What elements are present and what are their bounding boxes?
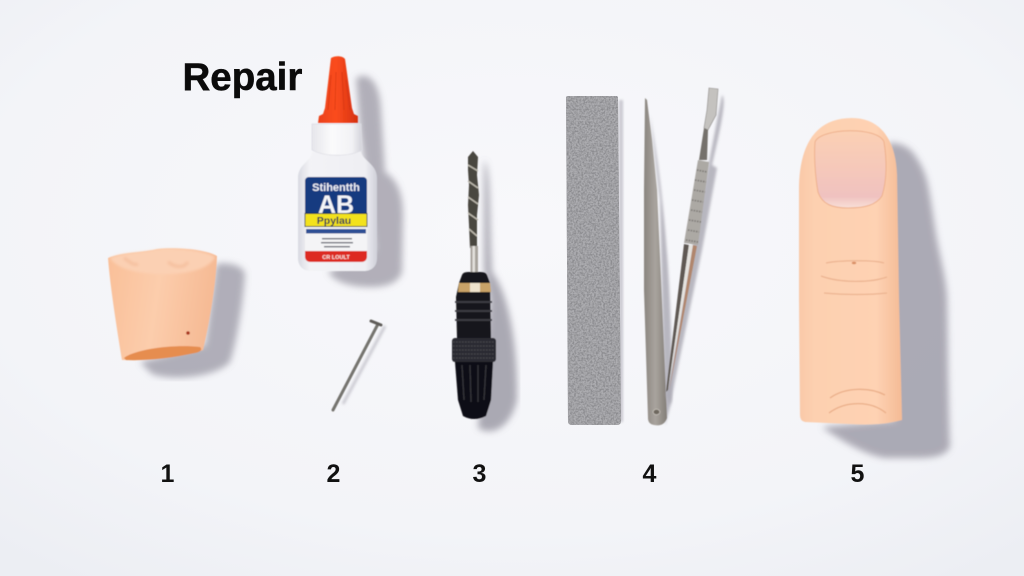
blade hole	[653, 409, 660, 415]
item 5: silicone thumb	[799, 118, 950, 458]
fingertip top dents	[124, 258, 188, 266]
shank highlight	[472, 246, 475, 273]
item 2b: nail	[333, 321, 385, 410]
pusher head	[704, 88, 718, 130]
knurl texture	[453, 342, 495, 358]
chuck grooves	[462, 365, 486, 402]
shadow: pusher	[666, 95, 724, 405]
label small print	[321, 238, 353, 247]
fingertip opening	[124, 346, 201, 360]
number 1: 1	[161, 460, 175, 488]
chuck ring highlight	[470, 283, 480, 292]
item 2: glue bottle	[298, 56, 403, 287]
fingertip red spot	[186, 331, 190, 335]
blade body	[644, 98, 667, 425]
shadow: blade	[650, 115, 672, 425]
shadow: thumb	[822, 143, 950, 458]
item 4: grey nail file	[566, 96, 623, 425]
handle bright side	[668, 245, 693, 390]
number 3: 3	[473, 460, 486, 488]
chuck lower	[455, 362, 493, 419]
fingertip body	[108, 248, 217, 360]
number 5: 5	[851, 460, 865, 488]
pusher neck	[699, 128, 708, 160]
heading: Repair: Repair	[182, 56, 302, 99]
bottle cap	[318, 56, 358, 123]
item 1: cut fingertip piece	[108, 248, 245, 378]
file body	[566, 96, 621, 425]
handle copper side	[669, 245, 697, 392]
label text: bottom: CR LOULT	[322, 255, 350, 261]
pusher handle	[666, 244, 697, 392]
label text: Stihentth: Stihentth	[312, 182, 360, 194]
shadow: drill	[478, 160, 517, 431]
nail shaft	[333, 324, 378, 410]
drill bit	[468, 151, 479, 248]
shadow: fingertip piece	[140, 263, 245, 378]
number 2: 2	[327, 460, 340, 488]
label red band	[305, 251, 367, 262]
item 4c: cuticle pusher	[666, 88, 724, 405]
drill shank	[470, 246, 478, 273]
label text: Ppylau: Ppylau	[317, 215, 351, 227]
handle dark side	[666, 244, 689, 392]
file shadow	[619, 100, 623, 422]
shadow: nail	[343, 326, 385, 404]
bottle collar	[312, 124, 362, 155]
thumb crease mark	[852, 262, 856, 264]
chuck ring	[458, 283, 491, 292]
label text: AB: AB	[318, 191, 354, 219]
label white panel	[305, 227, 367, 252]
chuck upper	[456, 272, 491, 338]
label blue panel	[305, 177, 367, 219]
bottle label	[305, 177, 367, 262]
fingertip top face	[110, 249, 215, 274]
number 4: 4	[643, 460, 657, 488]
nail head	[371, 321, 381, 325]
thumb lower creases	[829, 389, 886, 413]
shadow: bottle	[328, 76, 403, 287]
chuck knurl	[452, 338, 496, 362]
thumb body	[799, 118, 902, 424]
item 3: drill bit and chuck	[452, 151, 517, 431]
label dark band	[306, 229, 366, 234]
thumb nail	[815, 131, 886, 208]
cap ridges	[328, 72, 350, 110]
label yellow strip	[305, 214, 367, 226]
thumb knuckle creases	[821, 261, 887, 294]
pusher knurled grip	[684, 160, 709, 245]
pusher knurl texture	[686, 170, 707, 242]
drill flutes	[468, 165, 478, 236]
bottle body	[298, 152, 377, 271]
item 4b: metal blade	[644, 98, 672, 425]
chuck ribs	[455, 302, 492, 320]
